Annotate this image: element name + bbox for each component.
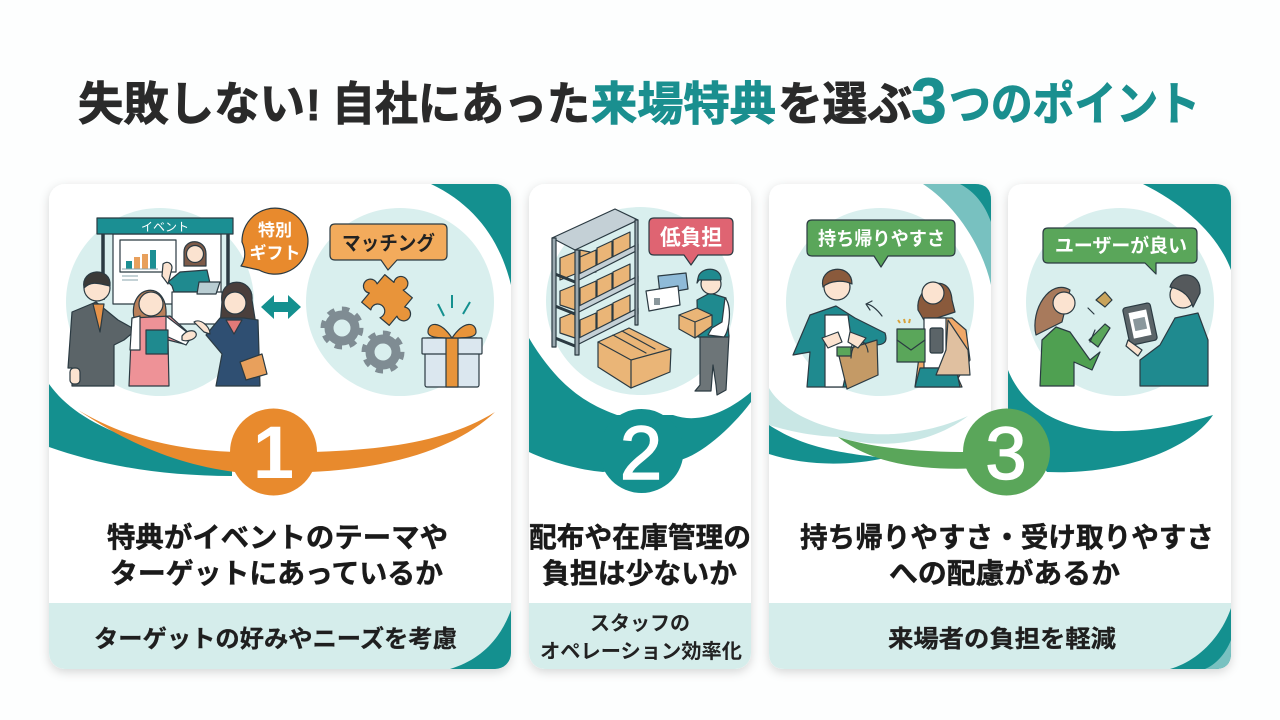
- note: point 2: スタッフの: [590, 612, 690, 635]
- heading: point 1: 特典がイベントのテーマや: [107, 521, 448, 553]
- swoosh and number 3: [838, 408, 1050, 496]
- callout: easy to carry: 持ち帰りやすさ: [818, 228, 945, 250]
- title: !: [306, 81, 321, 130]
- panel: point 3: [769, 184, 1231, 669]
- callout: easy to carry: [807, 220, 955, 267]
- title: 3: [911, 65, 947, 137]
- title: 自社にあった: [332, 78, 590, 130]
- heading: point 1: [107, 521, 448, 589]
- title: 来場特典: [591, 78, 776, 130]
- heading: point 1: ターゲットにあっているか: [110, 558, 443, 589]
- heading: point 3: への配慮があるか: [889, 557, 1120, 589]
- icon: cards: [646, 273, 688, 311]
- callout: matching: マッチング: [342, 231, 435, 255]
- swoosh and number 1: 1: [253, 411, 294, 494]
- callout: special gift: 特別: [258, 221, 292, 240]
- callout: low burden: [649, 218, 733, 265]
- panel: point 1: [49, 184, 511, 669]
- icon: puzzle and gears: [324, 260, 427, 370]
- illustration: event booth and visitors: [68, 218, 267, 386]
- title: [78, 65, 1200, 137]
- heading: point 3: [800, 522, 1214, 589]
- note: point 2: [540, 612, 742, 663]
- note: point 3: 来場者の負担を軽減: [888, 626, 1116, 653]
- callout: matching: [330, 224, 447, 270]
- callout: special gift: ギフト: [250, 244, 300, 263]
- panel: point 2: [529, 184, 751, 669]
- illustration: carrying bag: [793, 269, 970, 389]
- note: point 1: ターゲットの好みやニーズを考慮: [94, 625, 457, 653]
- number 2: [600, 409, 684, 496]
- callout: special gift: [241, 208, 308, 274]
- callout: user friendly: [1043, 228, 1197, 274]
- heading: point 2: 負担は少ないか: [542, 558, 737, 589]
- illustration: QR ticket exchange: [1035, 275, 1208, 386]
- illustration: event booth and visitors: イベント: [141, 220, 189, 234]
- title: 失敗しない: [78, 78, 305, 130]
- heading: point 2: 配布や在庫管理の: [529, 522, 751, 553]
- illustration: worker: [679, 269, 729, 395]
- illustration: inventory shelf: [552, 209, 671, 388]
- title: つのポイント: [949, 78, 1200, 130]
- number 2: 2: [620, 411, 662, 496]
- callout: user friendly: ユーザーが良い: [1055, 234, 1187, 257]
- heading: point 3: 持ち帰りやすさ・受け取りやすさ: [800, 522, 1214, 553]
- swoosh and number 1: [78, 408, 495, 496]
- title: を選ぶ: [778, 78, 912, 130]
- icon: gift box: [422, 295, 482, 387]
- swoosh and number 3: 3: [985, 412, 1027, 495]
- heading: point 2: [529, 522, 751, 589]
- note: point 2: オペレーション効率化: [540, 640, 742, 663]
- arrow: two-way: [261, 295, 301, 319]
- callout: low burden: 低負担: [660, 225, 722, 250]
